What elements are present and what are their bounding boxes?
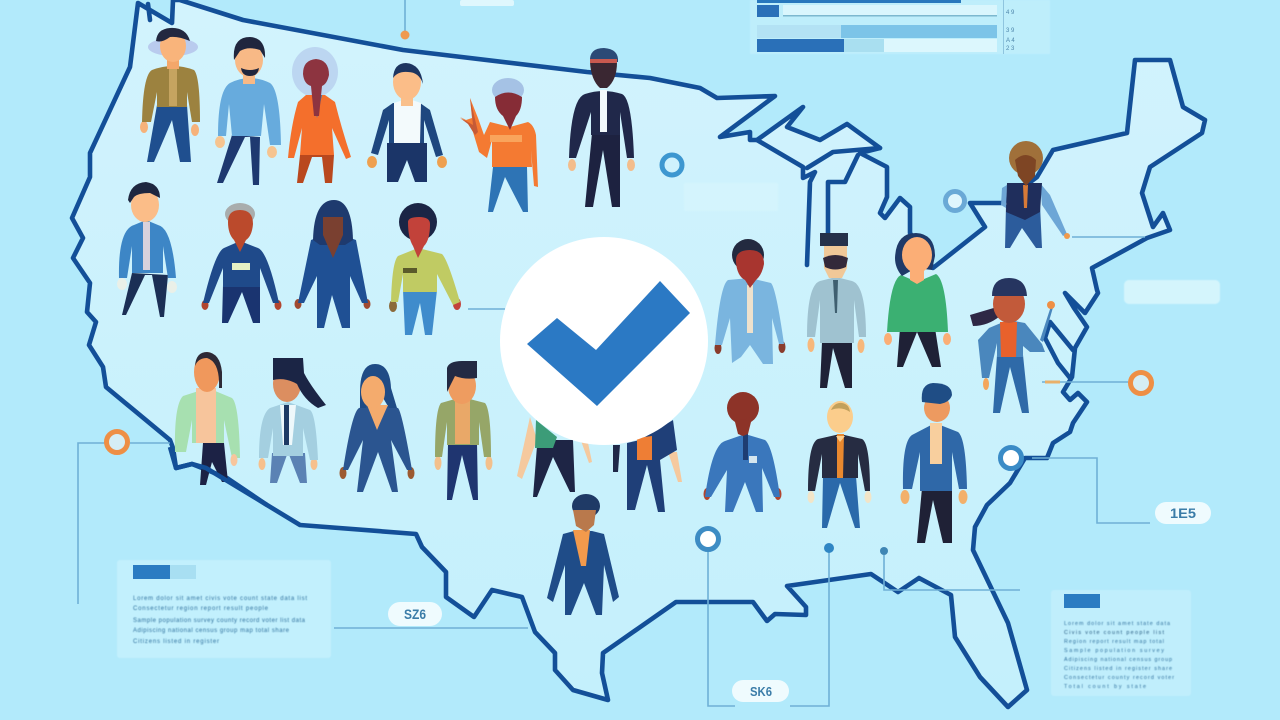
chart labels: 4 9 [1006, 10, 1015, 16]
person 6: black suit [568, 48, 635, 207]
person 15: green top behind circle [517, 417, 592, 497]
person 1: olive jacket [140, 28, 200, 162]
marker: blue ring north-east [946, 192, 964, 210]
note text: Sample population survey county record voter list data [133, 618, 306, 624]
note text: Total count by state [1064, 684, 1146, 690]
note text: Civis vote count people list [1064, 630, 1164, 636]
person 21: light blue coat [714, 239, 786, 364]
person 12: grey-blue jacket [258, 358, 326, 483]
note text: Lorem dolor sit amet civis vote count state data list [133, 596, 307, 602]
marker: blue ring north [662, 155, 682, 175]
person 14: olive jacket [434, 361, 492, 500]
marker: blue ring south [698, 528, 718, 550]
note text: Region report result map total [1064, 639, 1164, 645]
chart labels: 3 9 [1006, 28, 1015, 34]
note text: Adipiscing national census group map total share [133, 628, 290, 634]
person 5: orange top raising hand [460, 78, 538, 212]
person 13: navy female [340, 364, 414, 492]
faint label east [1124, 280, 1220, 304]
pill label: right [1155, 502, 1211, 524]
note text: Lorem dolor sit amet state data [1064, 621, 1170, 627]
marker: orange dot top [400, 30, 410, 40]
marker: orange ring left [106, 432, 128, 452]
note text: Consectetur region report result people [133, 606, 269, 612]
marker: blue ring east [1000, 448, 1022, 468]
check mark badge [500, 237, 708, 445]
person 2: blue sweater [215, 37, 281, 185]
note text: Citizens listed in register share [1064, 666, 1172, 672]
top white tag [460, 0, 514, 6]
person 22: grey-blue shirt black pants [807, 233, 866, 388]
person 23: green shirt [884, 233, 951, 367]
white circle [500, 237, 708, 445]
person 7: blue jacket [117, 182, 177, 317]
note text: Citizens listed in register [133, 639, 219, 645]
person 19: blue jacket black pants [900, 383, 968, 543]
marker: small orange tick [1045, 380, 1060, 384]
note text [1064, 621, 1174, 690]
note text: Consectetur county record voter [1064, 675, 1174, 681]
chart labels [1006, 10, 1015, 52]
person 10: yellow-green shirt [389, 203, 461, 335]
note text: Sample population survey [1064, 648, 1164, 654]
note text: Adipiscing national census group [1064, 657, 1172, 663]
pill label: right: 1E5 [1170, 505, 1196, 521]
chart labels: 2 3 [1006, 46, 1015, 52]
person 3: orange outfit with halo [288, 47, 351, 183]
person 24: blue with orange scarf [970, 278, 1055, 413]
person 20: navy suit orange neck [547, 494, 619, 615]
panel: right note [1051, 590, 1191, 696]
chart labels: A 4 [1006, 38, 1015, 44]
marker: blue dot [824, 543, 834, 553]
pill label: bottom: SK6 [750, 684, 772, 699]
person 11: light green jacket [175, 352, 240, 485]
check mark [527, 281, 690, 406]
person 9: navy with long hair [294, 200, 370, 328]
person 17: blue with brown face [704, 392, 782, 512]
person 16: navy with orange behind circle [613, 420, 682, 512]
panel: left note [117, 560, 331, 658]
person 8: navy with badge [202, 203, 282, 323]
note text [133, 596, 307, 645]
faint label north [684, 183, 778, 211]
person 4: navy jacket white shirt [367, 63, 447, 182]
marker: orange ring right [1130, 372, 1152, 394]
panel: top bar chart [750, 0, 1050, 54]
person 18: black jacket blue pants [808, 401, 872, 528]
marker: small blue dot [880, 547, 888, 555]
person 25: navy vest brown hair [1001, 141, 1070, 248]
coastline passing over person 11 [170, 447, 267, 505]
pill label: left: SZ6 [404, 606, 426, 622]
pill label: bottom [732, 680, 789, 702]
pill label: left [388, 602, 442, 626]
